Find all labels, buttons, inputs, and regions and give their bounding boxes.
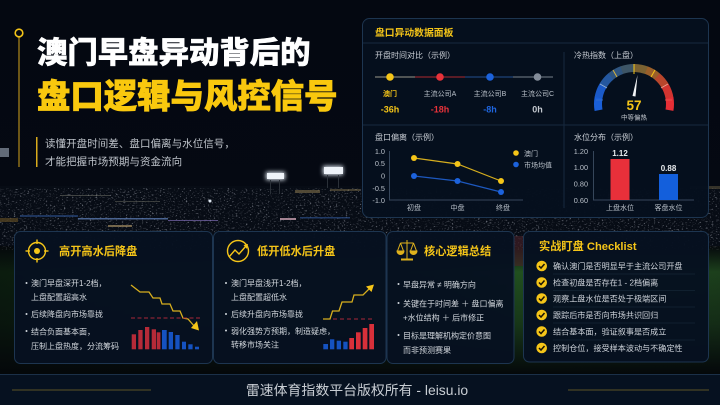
chart: water level bar chart: 0.88 [661,164,677,173]
panel: high open high water then drop [14,232,212,364]
chart: handicap deviation line chart: 1.0 [375,147,385,156]
bullet list: 澳门早盘浅开1-2档， [231,278,307,288]
panel: core logic summary [387,232,514,364]
chart: water level bar chart: 上盘水位 [606,203,634,212]
chart: water level bar chart: 1.20 [574,147,588,156]
bullet list: 后续降盘向市场靠拢 [31,309,103,319]
bullet list: 澳门早盘深开1-2档， [31,278,107,288]
bullet list [225,278,335,350]
bullet list: 目标是理解机构定价意图 [403,330,491,340]
chart: handicap deviation line chart: 澳门 [524,149,538,158]
bullet list: +水位结构 ＋ 后市修正 [403,312,484,322]
chart: handicap deviation line chart: 初盘 [407,203,421,212]
bullet list: 早盘异常 ≠ 明确方向 [403,280,476,290]
chart: water level bar chart: 客盘水位 [654,203,682,212]
subtitle: 才能把握市场预期与资金流向 [45,155,182,168]
chart: opening time comparison: 澳门 [383,89,397,98]
chart: opening time comparison: 开盘时间对比（示例） [375,50,455,60]
chart: opening time comparison: 主流公司C [521,89,554,98]
chart: water level bar chart [574,132,694,212]
checklist item 6: 控制仓位，接受样本波动与不确定性 [553,343,683,353]
title [37,36,338,116]
chart: water level bar chart: 1.00 [574,163,588,172]
checklist item 3: 观察上盘水位是否处于极端区间 [553,294,666,304]
chart: handicap deviation line chart: 0.5 [375,159,385,168]
icon: rising trend in circle [228,240,248,262]
subtitle [36,137,235,168]
title: 澳门早盘异动背后的 [37,36,311,70]
card heading: 核心逻辑总结 [424,244,491,258]
chart: opening time comparison: 0h [532,104,543,114]
checklist heading: 实战盯盘 Checklist [539,239,637,253]
chart: opening time comparison: 主流公司B [474,89,507,98]
chart: heat index gauge: 中等偏热 [621,112,648,122]
footer copyright text: 雷速体育指数平台版权所有 - leisu.io [246,382,468,398]
panel: market data dashboard [362,18,708,218]
checklist item 4: 跟踪后市是否向市场共识回归 [553,310,658,320]
title accent line with ring [15,29,23,167]
card heading: 低开低水后升盘 [257,244,335,258]
chart: handicap deviation line chart: 终盘 [496,203,510,212]
subtitle: 读懂开盘时间差、盘口偏离与水位信号， [45,137,235,150]
chart: handicap deviation line chart [372,132,552,212]
icon: target [26,240,48,262]
panel heading: 盘口异动数据面板 [375,26,454,39]
chart: opening time comparison: -36h [381,104,399,114]
chart: handicap deviation line chart: 0 [381,172,385,180]
chart: water level bar chart: 0.60 [574,196,588,205]
bullet list: 弱化强势方预期，制造疑虑， [231,326,335,336]
chart: opening time comparison [375,50,554,114]
checklist item 5: 结合基本面，验证叙事是否成立 [553,326,666,336]
bullet list [398,280,503,355]
chart: heat index gauge [574,50,685,155]
footer bar [0,374,720,405]
bullet list: 压制上盘热度，分流筹码 [31,341,119,351]
bullet list: 后续升盘向市场靠拢 [231,309,303,319]
checklist item 2: 检查初盘是否存在1 - 2档偏离 [553,278,658,288]
bullet list: 结合负面基本面， [31,326,95,336]
bullet list: 而非预测赛果 [403,345,451,355]
chart: handicap deviation line chart: -1.0 [372,196,385,205]
bullet list [26,278,119,351]
chart: heat index gauge: 冷热指数（上盘） [574,50,638,60]
bullet list: 上盘配置超高水 [31,292,87,302]
bullet list: 关键在于时间差 ＋ 盘口偏离 [403,298,503,308]
chart: opening time comparison: -18h [431,104,449,114]
checklist item 1: 确认澳门是否明显早于主流公司开盘 [553,261,683,271]
gauge value: 57 [626,98,642,113]
panel: practical checklist [524,232,708,362]
chart: water level bar chart: 0.80 [574,180,588,188]
chart: falling line with bars [131,285,200,349]
chart: handicap deviation line chart: 盘口偏离（示例） [375,132,439,142]
chart: opening time comparison: 主流公司A [424,89,457,98]
bullet list: 转移市场关注 [231,340,279,350]
chart: handicap deviation line chart: -0.5 [372,184,385,193]
panel: low open low water then rise [214,232,386,364]
chart: handicap deviation line chart: 市场均值 [524,160,552,170]
chart: opening time comparison: -8h [483,104,497,114]
card heading: 高开高水后降盘 [59,244,137,258]
chart: handicap deviation line chart: 中盘 [450,203,464,212]
chart: water level bar chart: 1.12 [612,149,628,158]
title: 盘口逻辑与风控信号 [37,79,338,116]
chart: rising line with bars [323,284,374,349]
gauge needle [632,75,638,96]
bullet list: 上盘配置超低水 [231,292,287,302]
icon: balance scales [397,240,417,260]
chart: water level bar chart: 水位分布（示例） [574,132,638,142]
